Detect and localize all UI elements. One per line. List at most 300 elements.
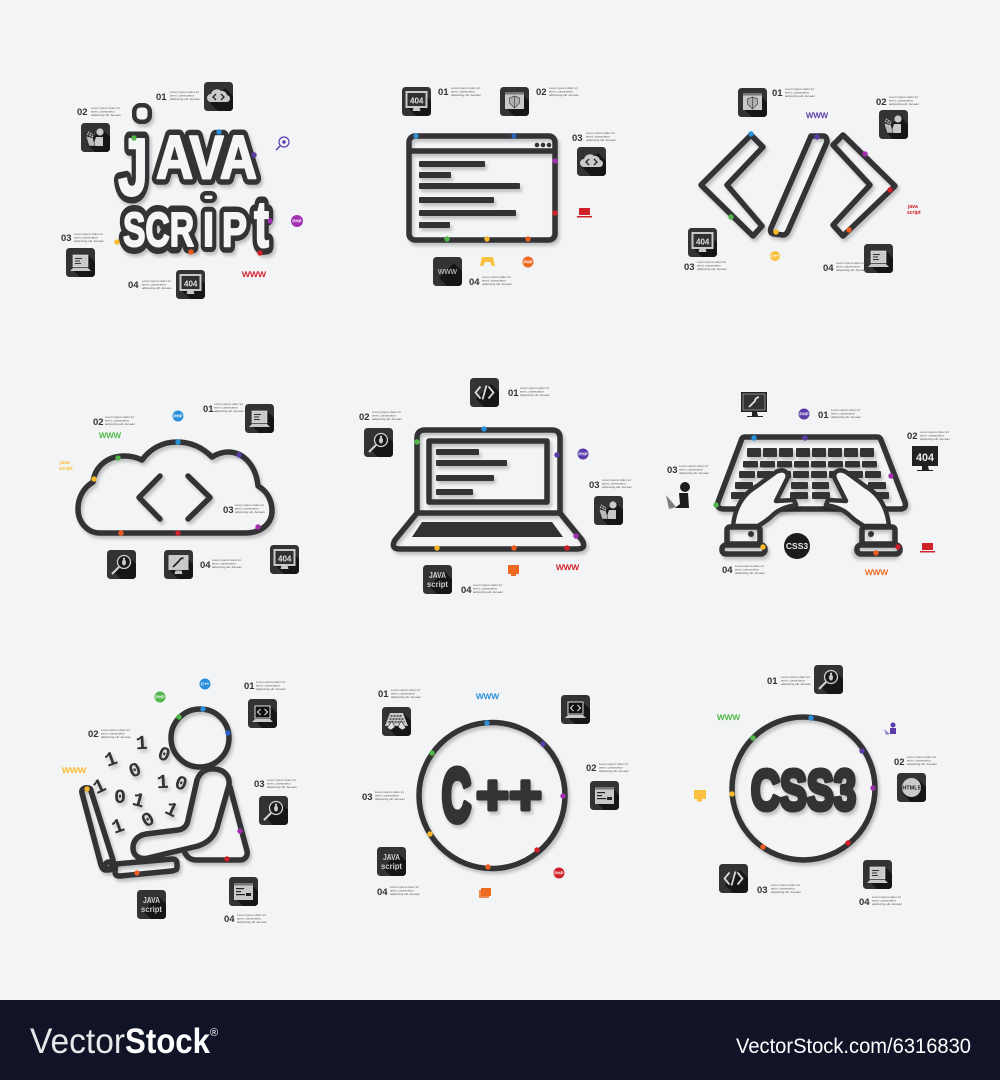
laptop text bars xyxy=(436,449,507,495)
icon: css3 circle xyxy=(784,533,810,559)
binary digits: 0 xyxy=(126,759,145,785)
www orange: www xyxy=(864,566,888,578)
icon: wrench monitor xyxy=(741,392,767,417)
icon: cloud code xyxy=(577,147,606,176)
label 03: 03 xyxy=(757,885,768,896)
binary digits: 1 xyxy=(156,772,169,795)
word outline: J xyxy=(118,122,148,213)
icon: 404 monitor xyxy=(688,228,717,257)
label 03: 03 xyxy=(572,133,583,144)
label 01 xyxy=(818,408,861,421)
word outline: t xyxy=(254,187,269,261)
www blue: www xyxy=(475,690,499,702)
label 02: 02 xyxy=(359,412,370,423)
keyboard keys xyxy=(731,448,889,499)
icon: php purple xyxy=(578,448,588,460)
label 04: Lorem ipsum dolor sit xyxy=(237,913,266,917)
icon: code xyxy=(470,378,499,407)
label 04: amet, consectetur xyxy=(237,916,261,920)
icon: laptop code xyxy=(561,695,590,724)
icon: 404 monitor: 404 xyxy=(696,238,710,246)
icon: coder purple xyxy=(884,722,896,735)
footer band xyxy=(0,1000,1000,1080)
label 04: adipiscing elit. Aenean xyxy=(735,571,765,575)
label 03: Lorem ipsum dolor sit xyxy=(586,131,615,135)
browser buttons xyxy=(535,143,551,147)
label 04: Lorem ipsum dolor sit xyxy=(836,261,865,265)
www green: www xyxy=(716,711,740,723)
label 03: Lorem ipsum dolor sit xyxy=(267,778,296,782)
label 04: adipiscing elit. Aenean xyxy=(212,565,242,569)
www green: www xyxy=(98,429,121,441)
label 03: Lorem ipsum dolor sit xyxy=(602,478,631,482)
icon: php orange: PHP xyxy=(523,260,533,264)
label 01: Lorem ipsum dolor sit xyxy=(170,90,199,94)
laptop keyboard xyxy=(412,522,563,537)
label 04: amet, consectetur xyxy=(473,586,497,590)
label 03: adipiscing elit. Aenean xyxy=(267,785,297,789)
label 01: adipiscing elit. Aenean xyxy=(451,93,481,97)
label 02 xyxy=(876,95,919,108)
css3 word: CSS3 xyxy=(751,758,856,822)
label 03: Lorem ipsum dolor sit xyxy=(74,232,103,236)
label 04: Lorem ipsum dolor sit xyxy=(872,895,901,899)
label 02: adipiscing elit. Aenean xyxy=(372,417,402,421)
label 02 xyxy=(359,410,402,423)
icon: javascript: JAVA xyxy=(429,571,446,580)
binary digits xyxy=(90,733,190,841)
label 02: adipiscing elit. Aenean xyxy=(889,102,919,106)
icon: c++ yellow: C++ xyxy=(771,254,780,258)
icon: 404 monitor xyxy=(402,87,431,116)
label 02: 02 xyxy=(894,757,905,768)
icon: laptop code xyxy=(248,699,277,728)
colour dots xyxy=(427,720,566,870)
label 02: adipiscing elit. Aenean xyxy=(105,422,135,426)
label 03: 03 xyxy=(223,505,234,516)
panel: laptop xyxy=(359,378,632,596)
panel: c++ xyxy=(362,688,629,898)
label 02 xyxy=(907,430,950,442)
label 03: amet, consectetur xyxy=(74,236,98,240)
c++ word xyxy=(442,754,542,837)
laptop screen and base xyxy=(82,788,177,876)
icon: browser xyxy=(590,781,619,810)
label 02: 02 xyxy=(907,431,918,442)
label 01: Lorem ipsum dolor sit xyxy=(785,87,814,91)
label 02: amet, consectetur xyxy=(101,732,125,736)
vectorstock logo: Vector xyxy=(30,1022,125,1061)
laptop screen xyxy=(429,441,547,502)
label 02: Lorem ipsum dolor sit xyxy=(91,106,120,110)
label 03 xyxy=(254,778,297,790)
word interior: SCR xyxy=(123,204,194,257)
c++ word: C xyxy=(442,754,471,837)
binary digits: 1 xyxy=(161,798,181,824)
label 02: adipiscing elit. Aenean xyxy=(549,93,579,97)
icon: 404 monitor: 404 xyxy=(184,280,198,288)
label 04 xyxy=(469,275,512,288)
label 04: 04 xyxy=(128,280,139,291)
icon: yellow gamepad xyxy=(480,257,495,266)
label 03: amet, consectetur xyxy=(771,886,795,890)
label 01: 01 xyxy=(508,388,519,399)
label 04 xyxy=(722,564,765,576)
icon: html5: HTML5 xyxy=(902,786,921,792)
label 04 xyxy=(461,583,503,596)
binary digits: 1 xyxy=(102,748,121,774)
label 02 xyxy=(93,415,135,428)
label 04: 04 xyxy=(224,914,235,925)
label 04: 04 xyxy=(377,887,388,898)
icon: red laptop xyxy=(577,208,592,218)
icon: 404 black monitor: 404 xyxy=(916,452,935,464)
word outline: AVA xyxy=(156,124,257,192)
label 01: Lorem ipsum dolor sit xyxy=(256,680,285,684)
label 04: Lorem ipsum dolor sit xyxy=(735,564,764,568)
icon: coder silhouette xyxy=(666,482,690,509)
label 03: amet, consectetur xyxy=(586,134,610,138)
label 01: Lorem ipsum dolor sit xyxy=(391,688,420,692)
label 04: amet, consectetur xyxy=(142,282,166,286)
circle outline xyxy=(732,717,875,860)
label 02: Lorem ipsum dolor sit xyxy=(101,728,130,732)
icon: www: www xyxy=(437,266,457,276)
label 01: amet, consectetur xyxy=(781,678,805,682)
icon: wrench monitor xyxy=(164,550,193,579)
word outline: SCR xyxy=(123,204,194,257)
icon: javascript: JAVA xyxy=(143,896,160,905)
label 03 xyxy=(757,883,801,896)
laptop outline xyxy=(393,430,584,549)
label 01: Lorem ipsum dolor sit xyxy=(214,402,243,406)
javascript red logo xyxy=(907,204,921,216)
icon: laptop xyxy=(864,244,893,273)
icon: javascript xyxy=(377,847,406,876)
label 03 xyxy=(684,260,727,273)
www red: www xyxy=(555,561,579,573)
label 03: 03 xyxy=(684,262,695,273)
label 01: amet, consectetur xyxy=(520,390,544,394)
icon: php purple: PHP xyxy=(578,452,588,456)
label 01: adipiscing elit. Aenean xyxy=(391,695,421,699)
word interior: I xyxy=(203,204,214,257)
word interior: J xyxy=(118,122,148,213)
keyboard outline xyxy=(718,437,905,509)
icon: code xyxy=(719,864,748,893)
c++ word: ++ xyxy=(476,763,542,826)
javascript yellow logo: java xyxy=(59,460,70,466)
binary digits: 1 xyxy=(129,789,147,814)
label 02: 02 xyxy=(586,763,597,774)
label 03: 03 xyxy=(589,480,600,491)
icon: bug magnifier xyxy=(107,550,136,579)
label 01 xyxy=(438,86,481,98)
icon: 404 monitor xyxy=(270,545,299,574)
label 04: 04 xyxy=(722,565,733,576)
label 02: Lorem ipsum dolor sit xyxy=(889,95,918,99)
label 02: adipiscing elit. Aenean xyxy=(91,113,121,117)
icon: orange monitor xyxy=(508,565,519,576)
label 04: Lorem ipsum dolor sit xyxy=(212,558,241,562)
icon: bug magnifier xyxy=(259,796,288,825)
label 04: adipiscing elit. Aenean xyxy=(836,268,866,272)
label 02: 02 xyxy=(93,417,104,428)
label 02: adipiscing elit. Aenean xyxy=(920,437,950,441)
left hand and cuff xyxy=(722,470,796,554)
label 03: Lorem ipsum dolor sit xyxy=(375,790,404,794)
label 03: adipiscing elit. Aenean xyxy=(771,890,801,894)
icon: html5 xyxy=(897,773,926,802)
icon: c++ blue: C++ xyxy=(201,682,210,686)
javascript red logo: java xyxy=(907,204,918,210)
label 04: adipiscing elit. Aenean xyxy=(142,286,172,290)
label 01: 01 xyxy=(767,676,778,687)
colour dots xyxy=(91,439,261,536)
icon: javascript: script xyxy=(381,862,402,871)
label 04: amet, consectetur xyxy=(735,568,759,572)
icon: php green xyxy=(154,692,166,702)
image id url: VectorStock.com/6316830 xyxy=(736,1035,971,1058)
label 01: Lorem ipsum dolor sit xyxy=(451,86,480,90)
label 02: amet, consectetur xyxy=(920,434,944,438)
icon: shield xyxy=(500,87,529,116)
label 03 xyxy=(589,478,632,491)
label 02: Lorem ipsum dolor sit xyxy=(105,415,134,419)
label 02 xyxy=(586,762,629,774)
browser outline xyxy=(409,136,555,240)
colour dots xyxy=(713,435,901,556)
icon: 404 monitor: 404 xyxy=(278,554,292,564)
binary digits: 1 xyxy=(109,815,128,841)
label 01 xyxy=(508,386,550,399)
label 02: 02 xyxy=(876,97,887,108)
label 02: 02 xyxy=(77,107,88,118)
colour dots xyxy=(728,131,893,235)
label 02 xyxy=(88,728,131,740)
right hand and cuff xyxy=(826,470,900,554)
label 01: Lorem ipsum dolor sit xyxy=(831,408,860,412)
label 01: Lorem ipsum dolor sit xyxy=(781,675,810,679)
vectorstock logo xyxy=(30,1022,218,1061)
label 04: 04 xyxy=(461,585,472,596)
panel: cloud xyxy=(59,402,299,579)
label 03: 03 xyxy=(254,779,265,790)
label 02: Lorem ipsum dolor sit xyxy=(372,410,401,414)
icon: purple magnifier xyxy=(276,137,289,150)
panel: keyboard and hands xyxy=(666,392,950,578)
label 01 xyxy=(203,402,244,415)
label 01: amet, consectetur xyxy=(170,94,194,98)
icon: keyboard xyxy=(382,707,411,736)
label 04: adipiscing elit. Aenean xyxy=(482,282,512,286)
label 03: amet, consectetur xyxy=(267,782,291,786)
label 03 xyxy=(572,131,616,144)
binary digits: 1 xyxy=(90,775,110,801)
icon: php green: PHP xyxy=(155,694,165,700)
icon: orange stack xyxy=(479,888,491,898)
label 04: adipiscing elit. Aenean xyxy=(390,892,420,896)
label 02: amet, consectetur xyxy=(599,766,623,770)
icon: bug magnifier xyxy=(814,665,843,694)
label 01: adipiscing elit. Aenean xyxy=(520,393,550,397)
icon: css3 circle: CSS3 xyxy=(786,541,808,551)
www purple: www xyxy=(805,109,828,121)
label 01: adipiscing elit. Aenean xyxy=(781,682,811,686)
person outline xyxy=(133,709,247,860)
icon: php purple: PHP xyxy=(292,218,302,224)
word interior: AVA xyxy=(156,124,257,192)
label 01: amet, consectetur xyxy=(785,90,809,94)
label 03: 03 xyxy=(667,465,678,476)
icon: bug magnifier xyxy=(364,428,393,457)
icon: c++ yellow xyxy=(770,251,780,261)
label 04: adipiscing elit. Aenean xyxy=(237,920,267,924)
label 01 xyxy=(244,680,286,692)
label 01: amet, consectetur xyxy=(451,90,475,94)
label 04: amet, consectetur xyxy=(836,264,860,268)
label 04 xyxy=(823,261,866,274)
label 03: adipiscing elit. Aenean xyxy=(602,485,632,489)
javascript outline word xyxy=(118,106,269,261)
label 01: amet, consectetur xyxy=(831,412,855,416)
label 04: amet, consectetur xyxy=(872,898,896,902)
label 04: adipiscing elit. Aenean xyxy=(872,902,902,906)
label 01: adipiscing elit. Aenean xyxy=(170,97,200,101)
icon: javascript: script xyxy=(141,905,162,914)
colour dots xyxy=(414,426,579,551)
panel: person with binary xyxy=(61,678,297,925)
label 04: 04 xyxy=(823,263,834,274)
www red: www xyxy=(241,268,266,280)
binary digits: 0 xyxy=(154,743,173,769)
icon: www xyxy=(433,257,462,286)
label 04 xyxy=(377,885,420,898)
cloud outline xyxy=(78,442,272,533)
label 02 xyxy=(894,755,937,768)
icon: c++ blue xyxy=(200,678,210,690)
icon: coder xyxy=(81,123,110,152)
www yellow: www xyxy=(61,764,86,776)
label 04: Lorem ipsum dolor sit xyxy=(482,275,511,279)
colour dots xyxy=(84,706,243,876)
label 03: adipiscing elit. Aenean xyxy=(586,138,616,142)
panel: browser window xyxy=(402,86,616,288)
label 04: adipiscing elit. Aenean xyxy=(473,590,503,594)
javascript red logo: script xyxy=(907,210,921,216)
label 03: Lorem ipsum dolor sit xyxy=(679,464,708,468)
label 03: amet, consectetur xyxy=(235,506,259,510)
label 02: amet, consectetur xyxy=(91,110,115,114)
icon: php red: PHP xyxy=(554,870,564,876)
word interior: t xyxy=(254,187,269,261)
label 04 xyxy=(224,913,267,925)
label 04: 04 xyxy=(200,560,211,571)
binary digits: 0 xyxy=(114,787,126,810)
label 01: 01 xyxy=(244,681,255,692)
word interior xyxy=(118,108,269,261)
label 04: Lorem ipsum dolor sit xyxy=(142,279,171,283)
icon: 404 monitor xyxy=(176,270,205,299)
colour dots xyxy=(729,715,876,850)
icon: red laptop xyxy=(920,543,935,552)
label 03: amet, consectetur xyxy=(375,794,399,798)
label 01 xyxy=(156,90,200,103)
javascript yellow logo xyxy=(59,460,73,472)
circle outline xyxy=(419,722,565,868)
icon: laptop xyxy=(245,404,274,433)
label 02: amet, consectetur xyxy=(889,98,913,102)
icon: 404 black monitor xyxy=(912,446,938,471)
label 03: amet, consectetur xyxy=(679,468,703,472)
icon: php purple: PHP xyxy=(799,412,809,416)
label 01: 01 xyxy=(203,404,214,415)
icon: 404 monitor: 404 xyxy=(410,96,424,106)
label 01: 01 xyxy=(438,87,449,98)
label 03: adipiscing elit. Aenean xyxy=(235,510,265,514)
label 04 xyxy=(859,895,902,908)
label 03: 03 xyxy=(362,792,373,803)
label 03: amet, consectetur xyxy=(602,482,626,486)
label 02: adipiscing elit. Aenean xyxy=(101,735,131,739)
label 01: adipiscing elit. Aenean xyxy=(214,409,244,413)
label 02: 02 xyxy=(536,87,547,98)
icon: php blue xyxy=(172,410,184,422)
icon: coder xyxy=(879,110,908,139)
icon: php red xyxy=(554,868,564,878)
panel: javascript xyxy=(61,82,303,299)
label 02 xyxy=(536,86,579,98)
icon: javascript xyxy=(423,565,452,594)
label 03: amet, consectetur xyxy=(697,264,721,268)
icon: php purple xyxy=(291,215,303,227)
word outline: I xyxy=(203,204,214,257)
binary digits: 0 xyxy=(171,772,190,798)
vectorstock logo: ® xyxy=(210,1027,218,1039)
label 01: 01 xyxy=(818,410,829,421)
label 04: amet, consectetur xyxy=(482,278,506,282)
label 04: amet, consectetur xyxy=(390,888,414,892)
colour dots xyxy=(114,129,273,256)
label 01 xyxy=(767,675,811,687)
label 03: adipiscing elit. Aenean xyxy=(375,797,405,801)
label 04: amet, consectetur xyxy=(212,562,236,566)
label 02: Lorem ipsum dolor sit xyxy=(920,430,949,434)
label 01 xyxy=(772,87,815,99)
label 01 xyxy=(378,688,421,700)
label 01: 01 xyxy=(156,92,167,103)
label 01: adipiscing elit. Aenean xyxy=(785,94,815,98)
icon: php purple xyxy=(798,408,810,420)
label 02: 02 xyxy=(88,729,99,740)
icon: cloud code xyxy=(204,82,233,111)
label 01: amet, consectetur xyxy=(256,684,280,688)
icon: laptop xyxy=(66,248,95,277)
icon: laptop xyxy=(863,860,892,889)
vectorstock logo: Stock xyxy=(125,1022,210,1061)
label 03: adipiscing elit. Aenean xyxy=(74,239,104,243)
label 04: 04 xyxy=(469,277,480,288)
icon: coder xyxy=(594,496,623,525)
binary digits: 0 xyxy=(138,808,160,834)
word outline xyxy=(118,106,269,261)
label 03: adipiscing elit. Aenean xyxy=(697,267,727,271)
label 02: Lorem ipsum dolor sit xyxy=(907,755,936,759)
brackets outline xyxy=(701,135,895,236)
label 03: Lorem ipsum dolor sit xyxy=(235,503,264,507)
label 04 xyxy=(200,558,242,571)
label 02: amet, consectetur xyxy=(907,758,931,762)
